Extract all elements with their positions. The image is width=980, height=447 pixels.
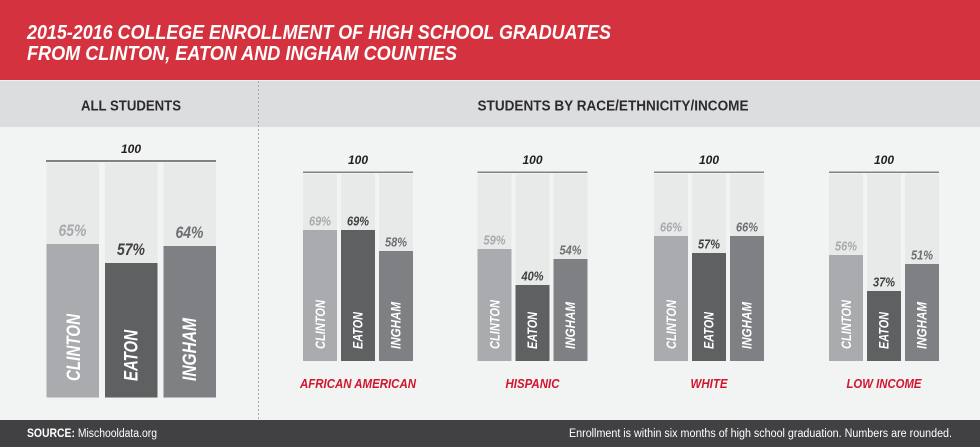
chart: all students (46, 142, 216, 398)
footer bar: Enrollment is within six months of high school graduation. Numbers are rounded. (569, 428, 952, 440)
chart: all students: CLINTON (64, 313, 85, 381)
chart: low income: 51% (911, 248, 933, 262)
chart: low income: 37% (873, 274, 895, 290)
chart: african american: CLINTON (313, 300, 328, 349)
chart: low income (829, 153, 939, 391)
chart: hispanic: INGHAM (563, 301, 578, 349)
chart: african american: 69% (347, 214, 369, 228)
section header band: ALL STUDENTS (81, 98, 181, 114)
chart: african american: 69% (309, 214, 331, 228)
chart: white: EATON (702, 312, 716, 349)
chart: low income: LOW INCOME (846, 377, 922, 391)
chart: all students: 100 (121, 142, 141, 156)
chart: hispanic: 100 (522, 153, 543, 167)
chart: white: 100 (699, 153, 719, 167)
chart: white (654, 153, 764, 391)
chart: african american (299, 153, 417, 391)
chart: african american: AFRICAN AMERICAN (299, 377, 417, 391)
chart: low income: CLINTON (839, 300, 854, 349)
chart: african american: INGHAM (388, 301, 404, 349)
footer bar (0, 420, 980, 447)
chart: low income: INGHAM (914, 301, 930, 349)
chart: all students: INGHAM (180, 317, 201, 381)
chart: white: CLINTON (664, 300, 679, 349)
section header band: STUDENTS BY RACE/ETHNICITY/INCOME (478, 98, 749, 114)
chart: white: 66% (660, 220, 682, 234)
chart: all students: 65% (58, 222, 87, 240)
chart: white: 57% (698, 236, 720, 252)
chart: hispanic (478, 153, 588, 391)
chart: hispanic: CLINTON (488, 300, 502, 349)
chart: all students: 57% (117, 241, 145, 259)
section header band (0, 81, 980, 127)
title banner (0, 0, 980, 80)
chart: low income: 56% (835, 238, 857, 254)
chart: african american: 58% (385, 234, 407, 250)
chart: hispanic: HISPANIC (506, 377, 560, 391)
chart: african american: 100 (348, 153, 368, 167)
chart: hispanic: EATON (525, 312, 540, 349)
chart: hispanic: 59% (484, 232, 506, 248)
chart: white: 66% (736, 220, 758, 234)
chart: african american: EATON (350, 312, 366, 349)
chart: white: WHITE (690, 377, 728, 391)
chart: white: INGHAM (740, 301, 754, 349)
title banner: FROM CLINTON, EATON AND INGHAM COUNTIES (27, 42, 457, 65)
chart: hispanic: 40% (521, 268, 544, 284)
chart: hispanic: 54% (560, 242, 582, 258)
chart: all students: 64% (176, 224, 204, 242)
chart: low income: EATON (876, 312, 892, 349)
chart: all students: EATON (122, 329, 142, 381)
footer bar: SOURCE: Mischooldata.org (27, 428, 157, 440)
title banner: 2015-2016 COLLEGE ENROLLMENT OF HIGH SCHOOL GRADUATES (26, 21, 611, 44)
chart: low income: 100 (874, 153, 894, 167)
